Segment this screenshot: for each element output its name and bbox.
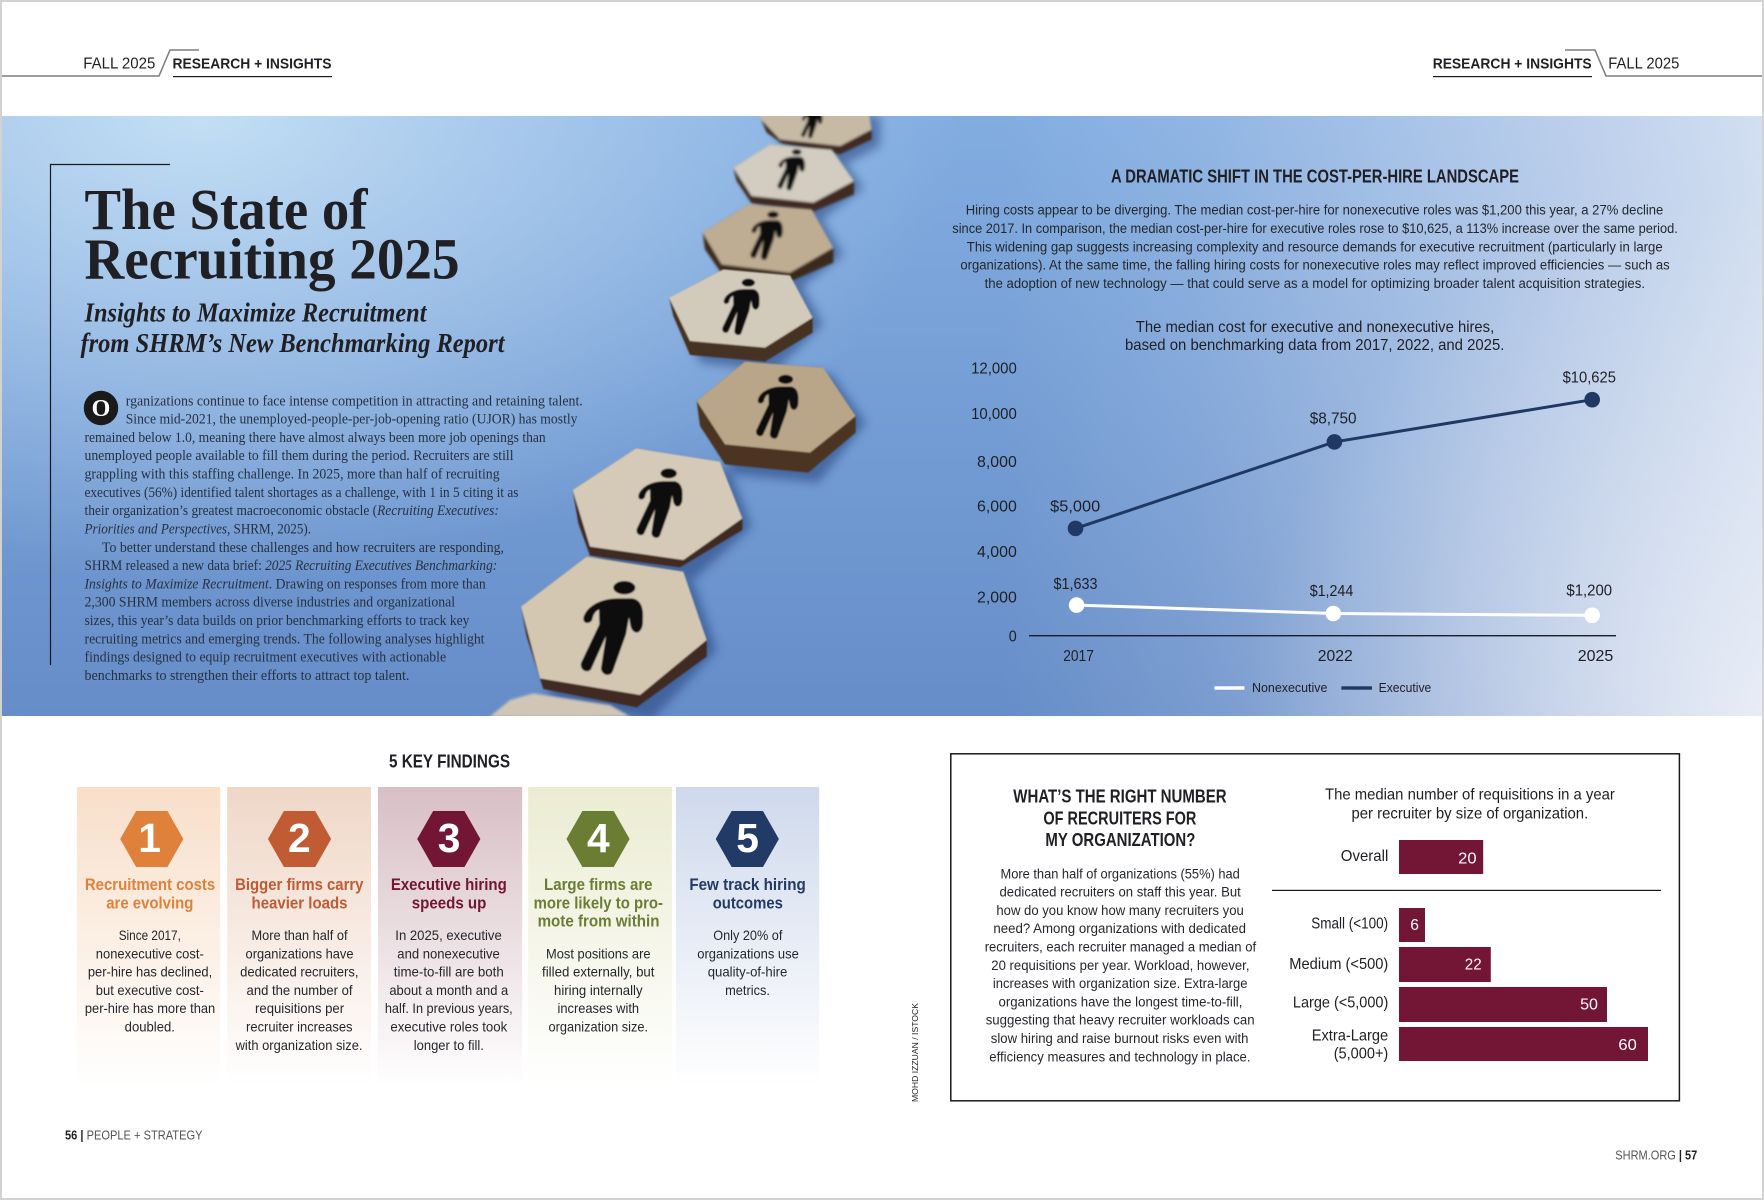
token 1 [760,116,874,156]
finding text: More than half of [252,928,348,943]
icon: hexagon 4: 4 [587,815,610,861]
cost-per-hire paragraph: Hiring costs appear to be diverging. The median cost-per-hire for nonexecutive roles was $1,200 this year, a 27% decline [966,203,1663,218]
icon: hexagon 3: 3 [438,815,460,861]
nonexecutive line [1054,576,1612,623]
heading: cost-per-hire: A DRAMATIC SHIFT IN THE COST-PER-HIRE LANDSCAPE [1111,166,1519,187]
intro body text: Priorities and Perspectives, SHRM, 2025). [84,522,311,538]
finding heading: mote from within [538,913,659,931]
bar: large: Large (<5,000) [1293,994,1388,1011]
near tokens group [490,448,752,720]
panel text: increases with organization size. Extra-large [993,976,1248,991]
intro body text: To better understand these challenges and how recruiters are responding, [102,540,504,556]
intro body text: findings designed to equip recruitment executives with actionable [84,650,446,666]
cost-per-hire paragraph [952,203,1678,291]
left running header: FALL 2025 [83,55,155,72]
finding heading: Executive hiring [391,876,507,894]
intro body text: Insights to Maximize Recruitment. Drawing on responses from more than [84,576,486,592]
intro body text: unemployed people available to fill them during the period. Recruiters are still [84,448,514,464]
finding card 3 [378,787,522,1087]
intro body text: rganizations continue to face intense competition in attracting and retaining talent. [126,393,583,409]
left running header [2,50,332,77]
finding text: recruiter increases [246,1019,353,1035]
bar: medium [1289,947,1491,982]
icon: hexagon 4 [566,811,630,867]
legend: Executive [1379,681,1431,695]
finding heading: Bigger firms carry [235,876,364,894]
title [84,177,460,292]
panel text: how do you know how many recruiters you [996,903,1244,918]
right running header: FALL 2025 [1608,55,1679,72]
finding heading [391,876,507,912]
far tokens group [669,106,880,483]
icon: hexagon 2 [268,811,331,867]
far token shadows [678,116,880,483]
nonexecutive line: $1,633 [1054,576,1098,593]
y axis labels [971,361,1017,646]
finding text: longer to fill. [414,1038,484,1053]
icon: hexagon 3 [417,811,480,867]
drop cap O [84,391,118,425]
finding text: increases with [557,1001,639,1016]
panel heading [1013,785,1227,850]
panel text: slow hiring and raise burnout risks even with [991,1031,1248,1046]
legend: Nonexecutive [1252,681,1327,695]
bar chart: requisitions per recruiter [1272,786,1661,1062]
finding card 2 [227,787,371,1087]
executive line: $5,000 [1050,499,1100,516]
finding card 5 [676,787,819,1087]
panel text: suggesting that heavy recruiter workloads can [986,1013,1255,1028]
intro body text: grappling with this staffing challenge. In 2025, more than half of recruiting [84,466,500,482]
finding text: metrics. [725,983,770,998]
panel text: organizations have the longest time-to-fill, [998,994,1242,1009]
panel text: efficiency measures and technology in place. [989,1049,1250,1064]
finding text: doubled. [125,1019,175,1035]
finding text: organizations use [697,946,799,961]
bar: large [1293,987,1607,1022]
heading: 5 key findings: 5 KEY FINDINGS [389,750,510,771]
token 3 [703,204,833,282]
panel: right number of recruiters [951,754,1679,1101]
legend [1214,681,1431,695]
bar: overall [1341,840,1483,874]
intro body text: sizes, this year’s data builds on prior benchmarking efforts to track key [84,613,470,629]
finding text: but executive cost- [96,983,204,998]
bar: small: 6 [1410,917,1419,934]
x axis: 2022 [1318,648,1353,665]
finding heading: Large firms are [544,876,653,894]
x axis [1029,635,1616,665]
panel text: dedicated recruiters on staff this year. But [1000,885,1241,900]
y axis labels: 6,000 [977,499,1017,516]
y axis labels: 4,000 [977,544,1017,561]
icon: hexagon 1 [120,811,183,867]
panel text: 20 requisitions per year. Workload, however, [991,958,1250,973]
bar: extra-large: 60 [1618,1037,1637,1054]
finding text: about a month and a [389,983,509,998]
chart title [1125,319,1504,354]
right running header: RESEARCH + INSIGHTS [1433,55,1592,72]
finding heading: speeds up [412,894,486,912]
panel heading: MY ORGANIZATION? [1045,829,1195,850]
y axis labels: 0 [1009,628,1017,646]
token 7 [521,557,707,707]
bar: medium: 22 [1465,956,1482,973]
finding text: time-to-fill are both [394,965,504,980]
finding text: per-hire has more than [85,1001,215,1016]
y axis labels: 10,000 [971,406,1017,423]
photo: wooden hexagon tokens with people [490,106,880,720]
icon: hexagon 2: 2 [288,815,311,861]
finding text: In 2025, executive [395,928,502,943]
intro body text [84,393,583,684]
finding heading: heavier loads [252,894,348,912]
finding text: dedicated recruiters, [240,965,358,980]
finding card 4 [528,787,672,1087]
y axis labels: 8,000 [977,454,1017,471]
intro body text: 2,300 SHRM members across diverse industries and organizational [84,595,455,611]
title: The State of [84,177,368,242]
finding text: organization size. [549,1019,648,1035]
icon: hexagon 1: 1 [138,815,161,861]
finding text: Since 2017, [119,928,181,943]
title: Recruiting 2025 [84,227,460,292]
panel text: need? Among organizations with dedicated [993,921,1246,936]
chart title: The median cost for executive and nonexecutive hires, [1136,319,1494,336]
finding text [385,928,513,1053]
x axis: 2017 [1063,648,1094,665]
cost-per-hire paragraph: organizations). At the same time, the falling hiring costs for nonexecutive roles may reflect improved efficiencies — such as [960,258,1670,273]
panel text [985,866,1256,1064]
subtitle [80,297,506,358]
hero photo panel background [2,116,1762,716]
bar: medium: Medium (<500) [1289,956,1388,973]
bar: large: 50 [1580,996,1598,1013]
finding text [85,928,215,1035]
right running header [1433,50,1762,77]
nonexecutive line: $1,244 [1310,583,1353,600]
bar: extra-large: Extra-Large [1312,1028,1388,1045]
panel text: More than half of organizations (55%) had [1000,866,1240,881]
panel text: recruiters, each recruiter managed a median of [985,940,1256,954]
nonexecutive line: $1,200 [1566,582,1612,599]
icon: hexagon 5: 5 [736,815,759,861]
finding text: nonexecutive cost- [96,946,204,961]
finding heading: Recruitment costs [85,876,215,894]
panel heading: OF RECRUITERS FOR [1043,807,1196,828]
token 5 [697,362,856,473]
finding heading: outcomes [713,894,783,912]
footer left: 56 | PEOPLE + STRATEGY [65,1127,203,1142]
finding text: Most positions are [546,946,651,961]
finding text: half. In previous years, [385,1001,513,1016]
bar: extra-large [1312,1027,1648,1062]
photo credit: MOHD IZZUAN / ISTOCK [910,1003,920,1102]
x axis: 2025 [1578,648,1613,665]
intro body text: Since mid-2021, the unemployed-people-per-job-opening ratio (UJOR) has mostly [126,412,578,428]
finding text [542,946,655,1035]
finding heading [689,876,806,912]
near token shadows [532,457,752,720]
chart title: based on benchmarking data from 2017, 2022, and 2025. [1125,337,1504,354]
finding text: filled externally, but [542,965,655,980]
executive line: $10,625 [1563,370,1616,387]
finding heading [85,876,215,912]
executive line: $8,750 [1310,411,1357,428]
bar: extra-large: (5,000+) [1334,1045,1388,1062]
finding text [235,928,362,1053]
finding text: Only 20% of [713,928,783,943]
token 4 [669,269,813,362]
bar chart title: The median number of requisitions in a year [1325,786,1615,803]
cost-per-hire paragraph: since 2017. In comparison, the median cost-per-hire for executive roles rose to $10,625, a 113% increase over the same period. [952,221,1678,236]
finding card 1 [77,787,220,1087]
token 6 [573,448,742,567]
intro body text: benchmarks to strengthen their efforts to attract top talent. [84,668,409,684]
cost-per-hire paragraph: the adoption of new technology — that could serve as a model for optimizing broader talent acquisition strategies. [985,276,1645,291]
bar chart title: per recruiter by size of organization. [1352,805,1588,822]
left running header: RESEARCH + INSIGHTS [172,55,332,72]
finding text [697,928,799,998]
token 8 [490,693,630,717]
panel heading: WHAT’S THE RIGHT NUMBER [1013,785,1227,806]
finding text: requisitions per [255,1001,345,1016]
finding heading [235,876,364,912]
line chart: median cost per hire [971,319,1616,695]
bar: small [1311,908,1425,942]
finding text: organizations have [246,946,354,961]
drop cap O: O [92,396,110,422]
finding heading: are evolving [106,894,193,912]
intro body text: executives (56%) identified talent shortages as a challenge, with 1 in 5 citing it as [84,485,519,501]
executive line [1050,370,1616,536]
finding heading: more likely to pro- [534,894,663,912]
bar chart title [1325,786,1615,822]
y axis labels: 12,000 [971,361,1017,378]
finding text: and the number of [247,983,353,998]
icon: hexagon 5 [716,811,779,867]
intro body text: recruiting metrics and emerging trends. The following analyses highlight [84,631,485,647]
intro body text: SHRM released a new data brief: 2025 Recruiting Executives Benchmarking: [84,558,497,574]
bar: small: Small (<100) [1311,915,1388,932]
finding text: with organization size. [235,1038,362,1053]
finding text: hiring internally [554,983,643,998]
y axis labels: 2,000 [977,590,1017,607]
finding text: and nonexecutive [397,946,500,961]
footer right: SHRM.ORG | 57 [1615,1147,1697,1162]
intro body text: their organization’s greatest macroeconomic obstacle (Recruiting Executives: [84,503,499,519]
finding heading: Few track hiring [689,876,806,894]
title rule [50,164,170,665]
intro body text: remained below 1.0, meaning there have almost always been more job openings than [84,430,546,446]
finding text: quality-of-hire [708,965,787,980]
cost-per-hire paragraph: This widening gap suggests increasing complexity and resource demands for executive recruitment (particularly in large [967,239,1663,254]
finding text: executive roles took [390,1019,508,1035]
subtitle: Insights to Maximize Recruitment [84,297,428,327]
token 2 [733,144,854,212]
bar: overall: 20 [1458,850,1477,867]
finding heading [534,876,663,931]
finding text: per-hire has declined, [88,965,212,980]
subtitle: from SHRM’s New Benchmarking Report [80,328,506,358]
bar: overall: Overall [1341,848,1388,865]
